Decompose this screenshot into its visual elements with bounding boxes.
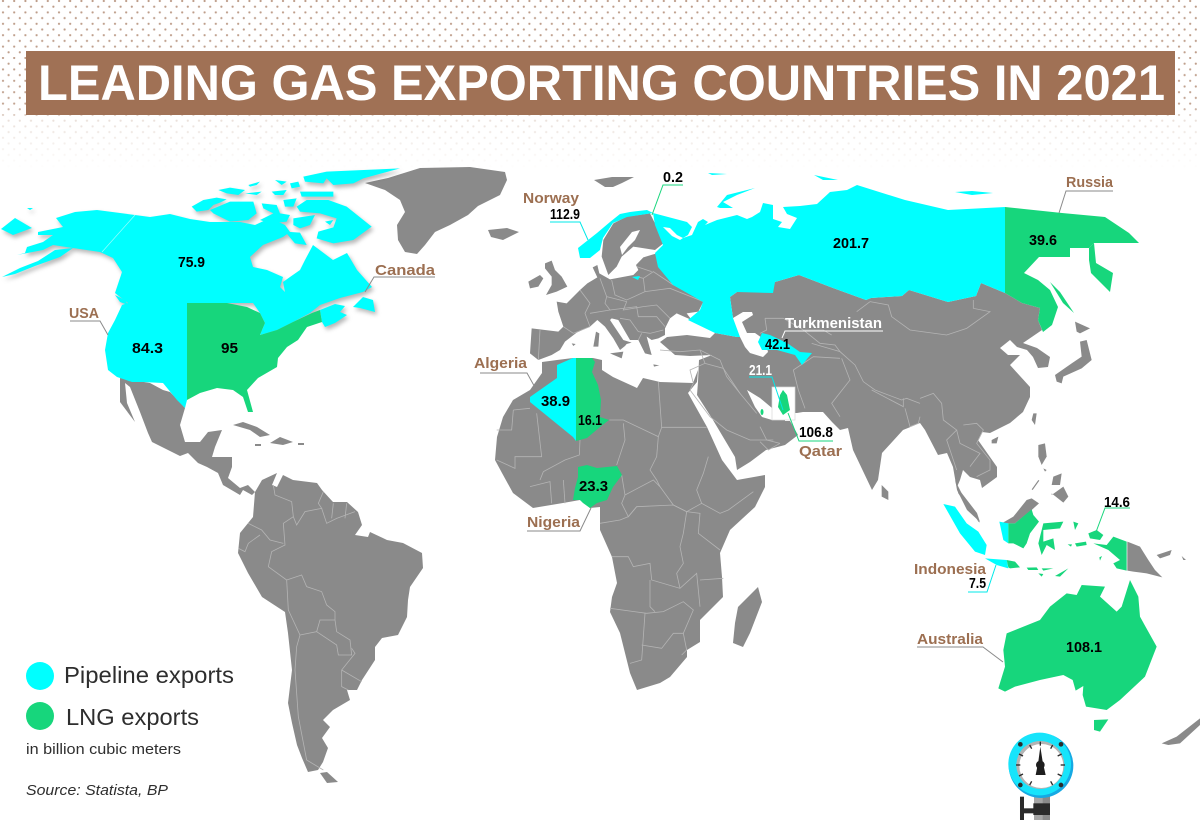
Iceland and Svalbard bbox=[488, 177, 634, 240]
Nigeria LNG bbox=[573, 465, 622, 508]
Africa borders bbox=[497, 382, 753, 663]
icon: pressure gauge bbox=[1008, 733, 1073, 820]
legend item: pipeline: Pipeline exports bbox=[64, 662, 234, 688]
world map bbox=[1, 167, 1200, 783]
label: Norway: Norway bbox=[523, 190, 580, 207]
label: Nigeria: Nigeria bbox=[527, 514, 581, 531]
label: Canada bbox=[365, 262, 436, 292]
Australia and Indonesia group bbox=[943, 480, 1200, 745]
value: Norway pipeline: 112.9 bbox=[550, 207, 580, 223]
value: Australia LNG: 108.1 bbox=[1066, 640, 1102, 656]
South America bbox=[238, 473, 423, 783]
Europe bbox=[528, 213, 703, 367]
label: Canada: Canada bbox=[375, 262, 436, 279]
Arctic islands bbox=[192, 168, 400, 245]
value: USA pipeline: 84.3 bbox=[132, 341, 163, 357]
Central America and Caribbean bbox=[120, 378, 304, 495]
label: USA bbox=[69, 305, 108, 335]
value: Qatar pipeline bbox=[749, 363, 783, 410]
title banner: LEADING GAS EXPORTING COUNTRIES IN 2021 bbox=[38, 55, 1165, 111]
units note: in billion cubic meters bbox=[26, 741, 181, 758]
label: Qatar: Qatar bbox=[799, 443, 842, 460]
value: Nigeria LNG: 23.3 bbox=[579, 479, 608, 495]
value: Qatar LNG: 106.8 bbox=[799, 425, 833, 441]
Asian islands bbox=[882, 322, 1092, 503]
value: Indonesia pipeline bbox=[968, 565, 996, 592]
value: Turkmenistan: 42.1 bbox=[765, 337, 790, 353]
label: USA: USA bbox=[69, 305, 99, 322]
Australia LNG bbox=[998, 580, 1157, 732]
label: Algeria: Algeria bbox=[474, 355, 528, 372]
value: Norway LNG: 0.2 bbox=[663, 170, 683, 186]
source: Source: Statista, BP bbox=[26, 782, 168, 799]
Algeria pipeline bbox=[530, 358, 576, 441]
Malaysia, Papua New Guinea and New Zealand bbox=[955, 480, 1200, 745]
value: Indonesia LNG: 14.6 bbox=[1104, 495, 1130, 511]
value: Norway LNG bbox=[652, 170, 683, 215]
value: Qatar LNG bbox=[788, 413, 833, 441]
Persian Gulf bbox=[747, 390, 772, 420]
Greenland bbox=[365, 167, 507, 254]
Canada and Alaska pipeline bbox=[1, 168, 400, 335]
Qatar inset bbox=[760, 387, 795, 420]
legend bbox=[26, 662, 234, 758]
label: Turkmenistan: Turkmenistan bbox=[785, 315, 882, 332]
label: Russia bbox=[1059, 174, 1114, 213]
Alaska border bbox=[102, 215, 135, 252]
value: Indonesia LNG bbox=[1096, 495, 1130, 532]
legend item: LNG: LNG exports bbox=[66, 704, 199, 730]
USA LNG bbox=[187, 303, 322, 412]
USA pipeline bbox=[105, 303, 187, 408]
label: Russia: Russia bbox=[1066, 174, 1114, 191]
label: Indonesia: Indonesia bbox=[914, 561, 987, 578]
Europe borders bbox=[538, 267, 703, 360]
label: Australia bbox=[917, 631, 1003, 662]
Asia borders bbox=[760, 300, 990, 477]
White Sea bbox=[663, 227, 683, 240]
label: Australia: Australia bbox=[917, 631, 984, 648]
Turkmenistan pipeline bbox=[758, 333, 812, 365]
value: Russia pipeline: 201.7 bbox=[833, 236, 869, 252]
legend item: LNG bbox=[26, 702, 199, 730]
Norway pipeline bbox=[578, 210, 653, 258]
Russia LNG bbox=[1005, 207, 1139, 332]
value: Indonesia pipeline: 7.5 bbox=[969, 576, 986, 592]
Africa bbox=[495, 358, 765, 690]
Russia pipeline bbox=[632, 173, 1005, 337]
South America borders bbox=[238, 485, 362, 770]
Gulf of Bothnia bbox=[620, 230, 640, 255]
Asia bbox=[660, 275, 1050, 522]
Algeria LNG bbox=[576, 358, 609, 441]
value: Norway pipeline bbox=[550, 207, 588, 240]
Indonesia pipeline bbox=[943, 504, 1008, 568]
value: Russia LNG: 39.6 bbox=[1029, 233, 1057, 249]
value: Algeria pipeline: 38.9 bbox=[541, 394, 570, 410]
label: Algeria bbox=[474, 355, 537, 391]
value: USA LNG: 95 bbox=[221, 341, 238, 357]
Indonesia LNG bbox=[1007, 509, 1127, 577]
Madagascar bbox=[733, 587, 762, 647]
label: Nigeria bbox=[527, 508, 591, 531]
value: Algeria LNG: 16.1 bbox=[578, 413, 602, 429]
value: Qatar pipeline: 21.1 bbox=[749, 363, 772, 379]
value: Canada pipeline: 75.9 bbox=[178, 255, 205, 271]
